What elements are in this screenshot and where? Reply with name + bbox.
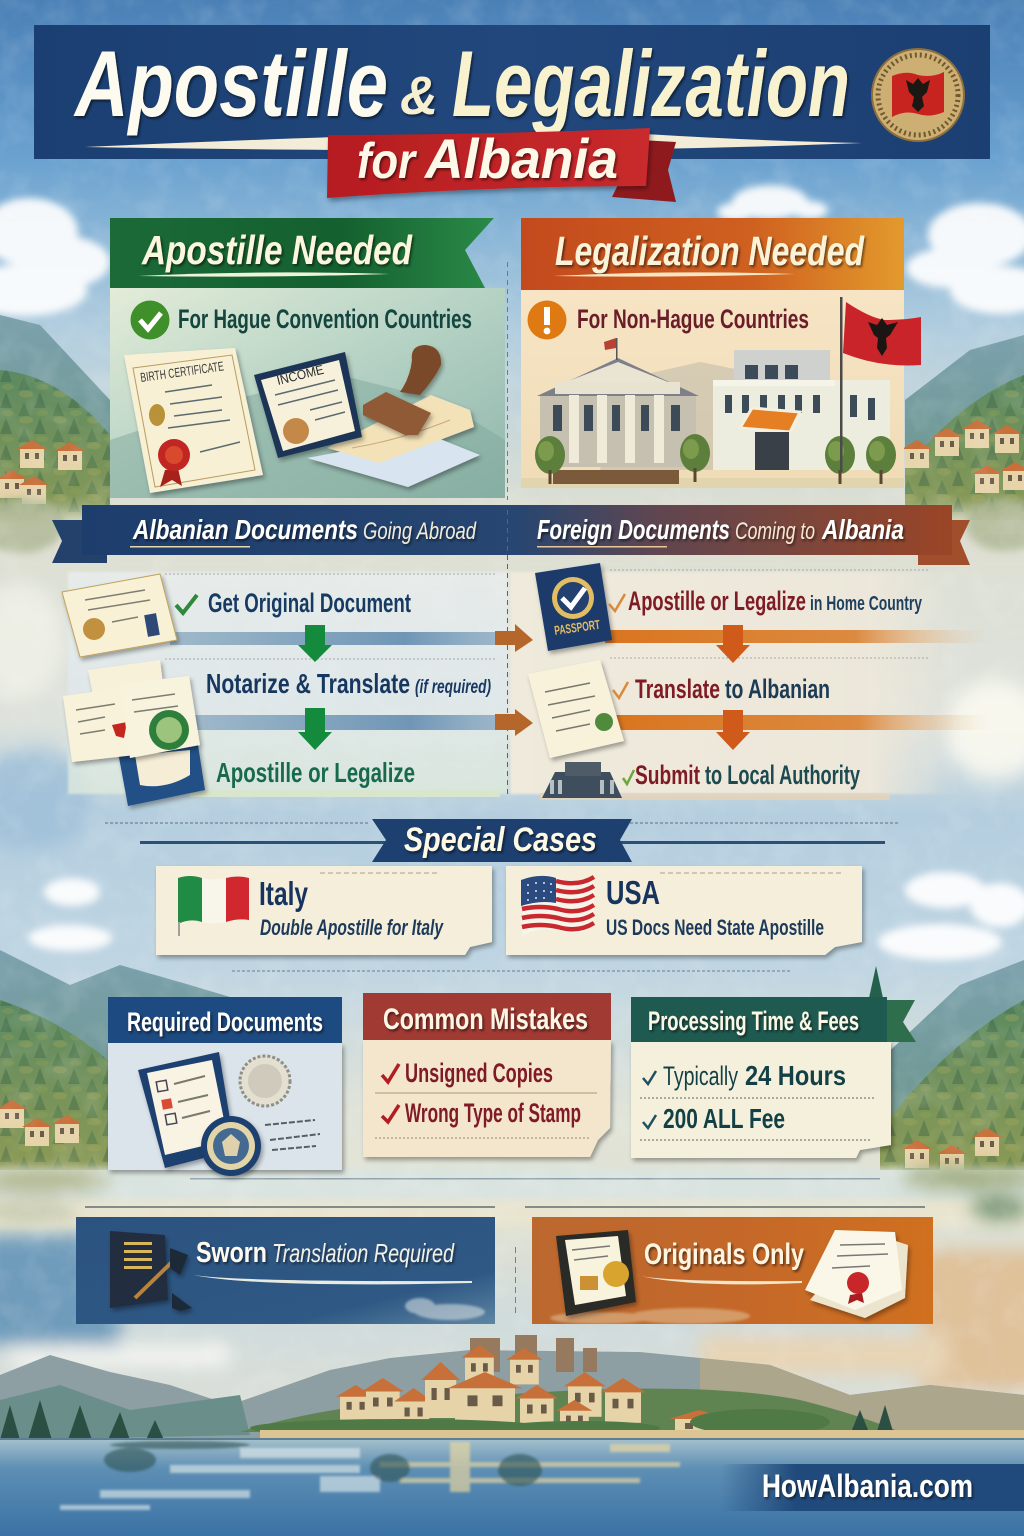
step: translate to Albanian: Translate: [635, 674, 720, 704]
step: submit to local authority: [623, 760, 860, 790]
illustration: classical building: [537, 338, 699, 484]
upper mountains: [0, 315, 110, 520]
icon: navy emblem: [201, 1116, 261, 1176]
step: notarize and translate: (if required): [415, 677, 491, 698]
subheading: For Non-Hague Countries: [577, 304, 809, 334]
step: apostille or legalize: Apostille or Legalize: [216, 757, 415, 788]
footer website: HowAlbania.com: [762, 1468, 973, 1504]
certificate: birth: BIRTH CERTIFICATE: [139, 358, 225, 385]
flow: Albanian documents going abroad: [62, 574, 505, 806]
icon: rubber stamp: [363, 345, 441, 435]
banner: direction of documents: Coming to: [735, 518, 815, 545]
icon: paper stack: [307, 395, 480, 487]
arrow: right connector 2: [495, 709, 533, 736]
panel: legalization needed: [521, 218, 921, 488]
callout: originals only: [532, 1217, 933, 1324]
title ampersand: &: [400, 66, 438, 126]
icon: US flag: [521, 874, 594, 936]
card: required documents: [108, 997, 342, 1176]
icon: book with certificate: [556, 1230, 636, 1316]
card: common mistakes: [363, 993, 611, 1157]
callout: sworn translation required: [76, 1217, 495, 1324]
card: required documents: Required Documents: [127, 1007, 323, 1037]
certificate: income: INCOME: [275, 362, 326, 388]
item: 200 ALL fee: 200 ALL Fee: [663, 1103, 785, 1134]
subtitle ribbon: Albania: [423, 127, 618, 190]
item: unsigned copies: [382, 1058, 553, 1088]
left heading: Albanian Documents: [132, 514, 358, 545]
flow: foreign documents coming to Albania: [528, 563, 990, 800]
swoosh underline: [85, 134, 862, 150]
right heading: Foreign Documents: [537, 514, 730, 545]
callout: sworn translation required: Sworn: [196, 1237, 267, 1269]
card: common mistakes: Common Mistakes: [383, 1003, 588, 1036]
icon: Albanian flag: [840, 297, 921, 472]
step: submit to local authority: Submit: [635, 760, 700, 790]
seal with Albanian flag: [872, 49, 964, 141]
banner: direction of documents: Going Abroad: [363, 518, 476, 545]
item: typically 24 hours: [643, 1060, 846, 1091]
title text: Legalization: Legalization: [452, 31, 850, 136]
card: processing time and fees: [631, 997, 916, 1158]
bottom range: [0, 1350, 1024, 1440]
icon: certificate: [62, 574, 177, 657]
banner: direction of documents: [52, 505, 970, 565]
card: Italy: [156, 866, 492, 955]
item: typically 24 hours: 24 Hours: [745, 1060, 846, 1091]
item: unsigned copies: Unsigned Copies: [405, 1058, 553, 1088]
side tones: [0, 580, 1024, 1390]
item: wrong type of stamp: Wrong Type of Stamp: [405, 1098, 581, 1128]
icon: document folder: [118, 745, 205, 806]
item: wrong type of stamp: [382, 1098, 581, 1128]
arrow: right connector 1: [495, 624, 533, 652]
item: 200 ALL fee: [643, 1103, 785, 1134]
arrow: down orange 2: [716, 710, 750, 750]
panel: apostille needed: [110, 218, 505, 498]
card: Italy: Double Apostille for Italy: [260, 915, 444, 940]
title banner: [34, 25, 990, 159]
subtitle ribbon: for: [357, 133, 417, 189]
title text: Apostille: Apostille: [73, 31, 388, 136]
icon: check circle: [130, 300, 170, 340]
callout: originals only: Originals Only: [644, 1238, 804, 1271]
illustration: modern government building: [713, 350, 890, 470]
step: submit to local authority: to Local Authority: [705, 760, 860, 790]
icon: checklist clipboard: [138, 1052, 235, 1168]
step: get original document: [176, 588, 411, 618]
lower mountains: [0, 950, 240, 1170]
icon: lone pine tree: [869, 966, 883, 998]
illustration: trees: [535, 434, 896, 484]
step: apostille or legalize in home country: Apostille or Legalize: [628, 586, 806, 616]
step: notarize and translate: Notarize & Translate: [206, 668, 410, 699]
card: USA: USA: [606, 874, 660, 911]
flow section backgrounds: [68, 570, 960, 794]
icon: passport: [535, 563, 612, 651]
step: translate to Albanian: [613, 674, 830, 704]
icon: certificate stack with red seal: [805, 1230, 908, 1318]
hill town: [250, 1335, 830, 1438]
dashed divider: [506, 262, 508, 500]
lake: [0, 1439, 1024, 1536]
header ribbon: [521, 218, 904, 290]
card: processing time and fees: Processing Time & Fees: [648, 1006, 859, 1036]
icon: folder with pen: [110, 1231, 192, 1311]
step: get original document: Get Original Document: [208, 588, 411, 618]
subheading: For Hague Convention Countries: [178, 304, 472, 334]
icon: translated document: [528, 660, 624, 758]
icon: Italian flag: [178, 876, 249, 936]
header ribbon: [110, 218, 494, 288]
arrow: down orange 1: [716, 625, 750, 663]
callout: sworn translation required: Translation Required: [272, 1238, 455, 1268]
icon: exclamation circle: [528, 300, 566, 340]
step: apostille or legalize in home country: in Home Country: [810, 593, 923, 615]
icon: passport: PASSPORT: [553, 617, 601, 638]
heading: Apostille Needed: [141, 227, 413, 273]
subtitle ribbon: [327, 127, 676, 202]
certificate: birth: [124, 348, 263, 493]
item: typically 24 hours: Typically: [663, 1061, 738, 1091]
heading: Legalization Needed: [555, 228, 865, 274]
step: translate to Albanian: to Albanian: [725, 674, 830, 704]
icon: silver seal: [240, 1056, 290, 1106]
lake strip: [0, 1168, 1024, 1208]
card: USA: [506, 866, 862, 955]
arrow: down green 2: [298, 708, 332, 750]
special cases heading ribbon: Special Cases: [404, 821, 597, 859]
icon: overlapping documents: [63, 660, 200, 762]
card: USA: US Docs Need State Apostille: [606, 915, 824, 940]
icon: local authority building: [542, 762, 622, 798]
banner: direction of documents: Albania: [821, 514, 904, 545]
arrow: down green 1: [298, 625, 332, 662]
certificate: income: [254, 352, 362, 458]
card: Italy: Italy: [259, 875, 308, 912]
